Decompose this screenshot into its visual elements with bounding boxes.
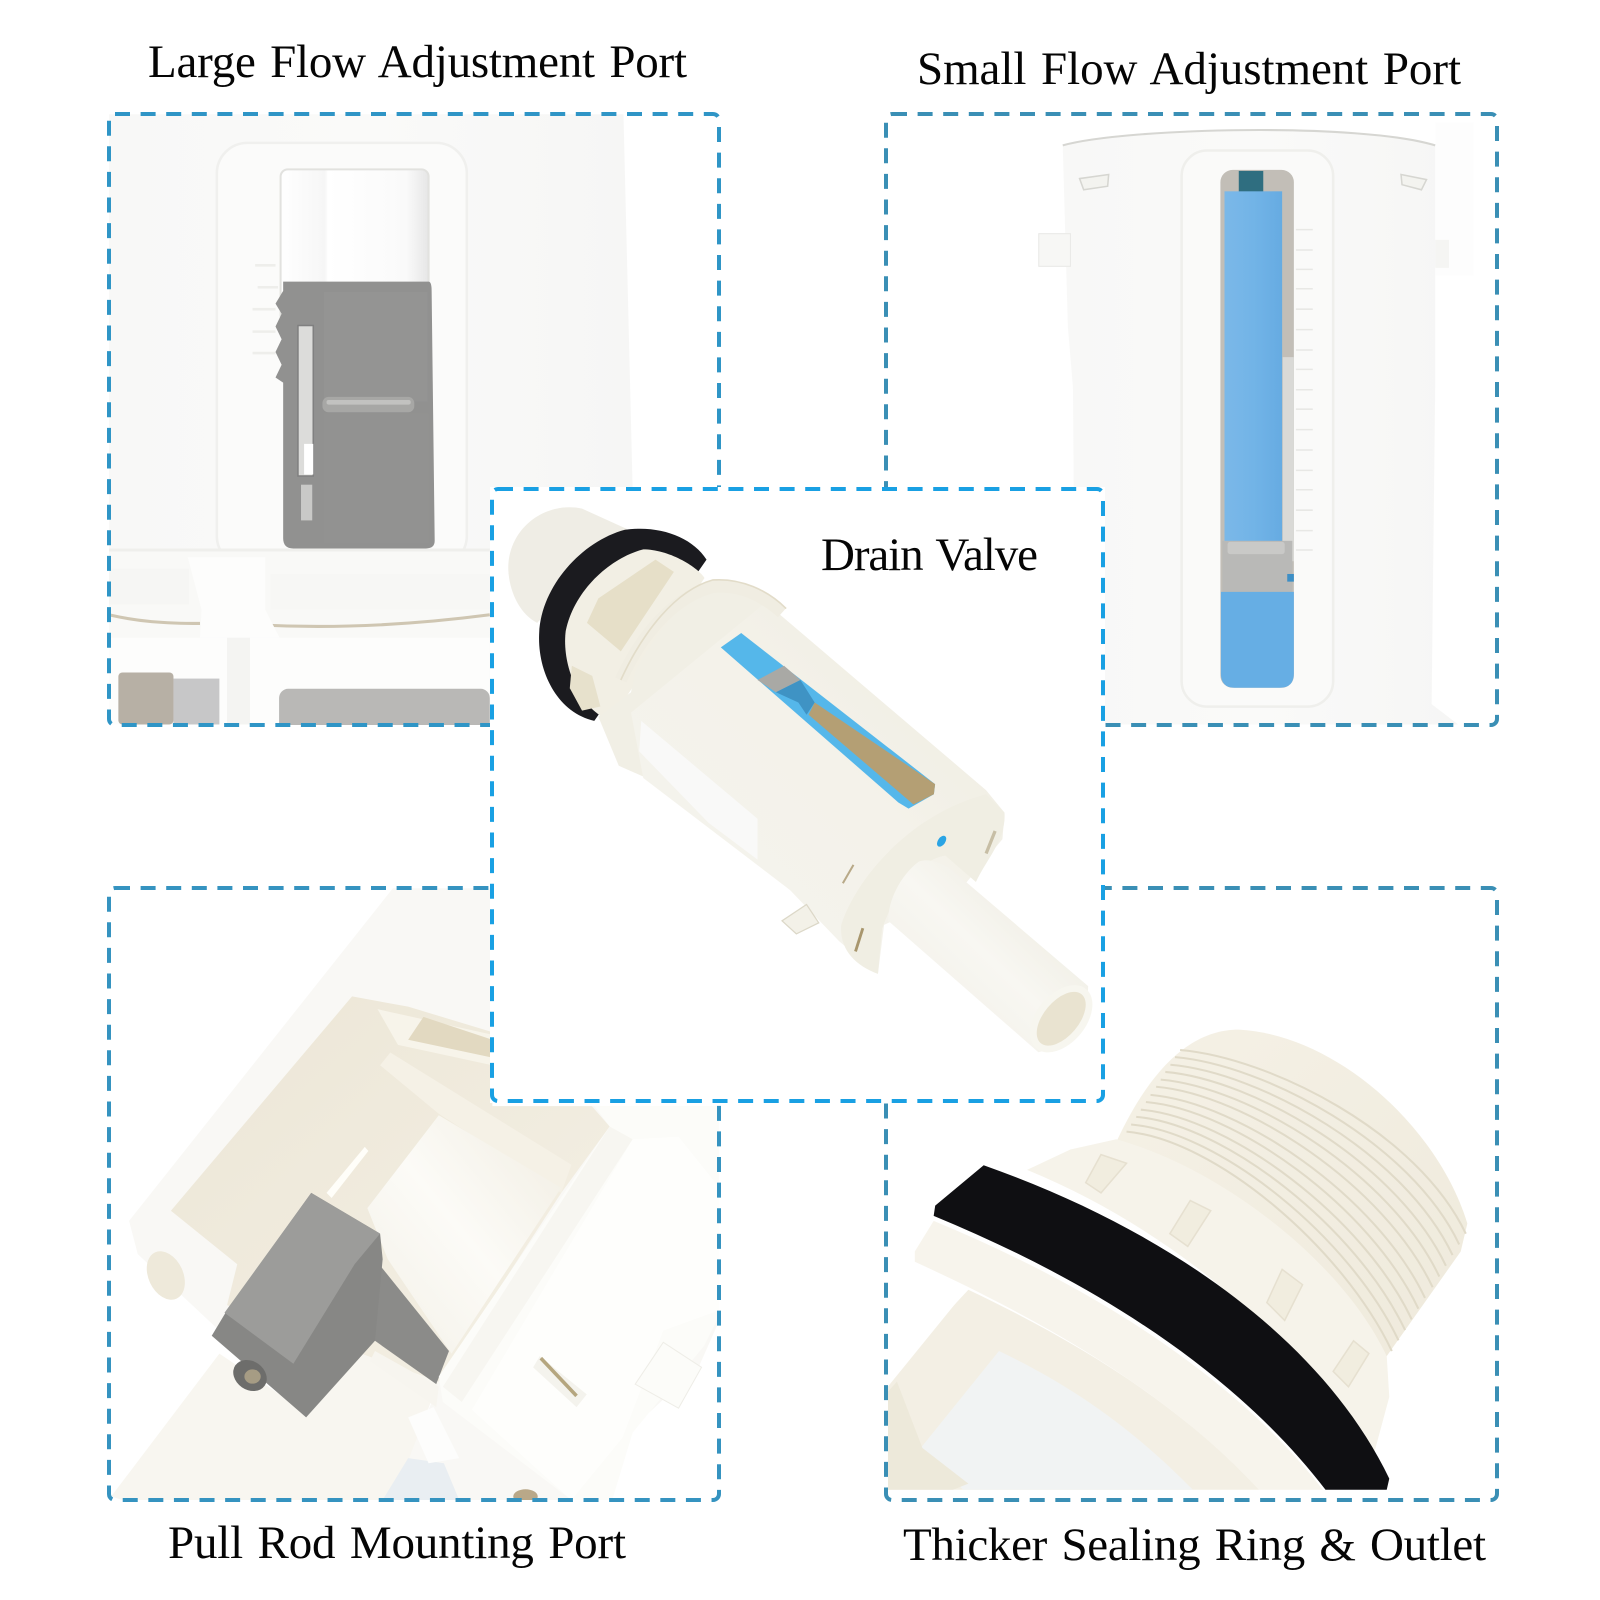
label: drain valve: Drain Valve (821, 529, 1038, 581)
dashed frame (492, 489, 1103, 1101)
dashed frame (886, 114, 1497, 725)
photo: pull rod mount (111, 888, 719, 1504)
dashed frame (109, 114, 719, 725)
dashed frame (886, 888, 1497, 1500)
end cap (841, 794, 1005, 974)
heading: thicker sealing ring and outlet: Thicker Sealing Ring & Outlet (903, 1519, 1486, 1571)
valve top cylinder (508, 507, 627, 623)
photo: sealing ring and threaded outlet (888, 1030, 1467, 1490)
dashed frame (109, 888, 719, 1500)
panel background (490, 487, 1105, 1103)
panel: pull rod mounting port (109, 888, 719, 1504)
photo: drain valve (508, 507, 1105, 1064)
panel: thicker sealing ring and outlet (886, 888, 1497, 1500)
heading: small flow adjustment port: Small Flow Adjustment Port (917, 43, 1461, 95)
black sealing ring (539, 529, 707, 721)
heading: pull rod mounting port: Pull Rod Mounting Port (168, 1517, 626, 1569)
heading: large flow adjustment port: Large Flow Adjustment Port (148, 36, 687, 88)
panel: drain valve (490, 487, 1105, 1103)
photo: small flow adjustment slider (1039, 122, 1473, 724)
cage and collar (565, 549, 704, 721)
panel: large flow adjustment port (109, 114, 719, 735)
panel: small flow adjustment port (886, 114, 1497, 725)
photo: large flow adjustment slider (109, 114, 633, 735)
level window (721, 633, 935, 809)
outlet pipe (888, 860, 1088, 1052)
